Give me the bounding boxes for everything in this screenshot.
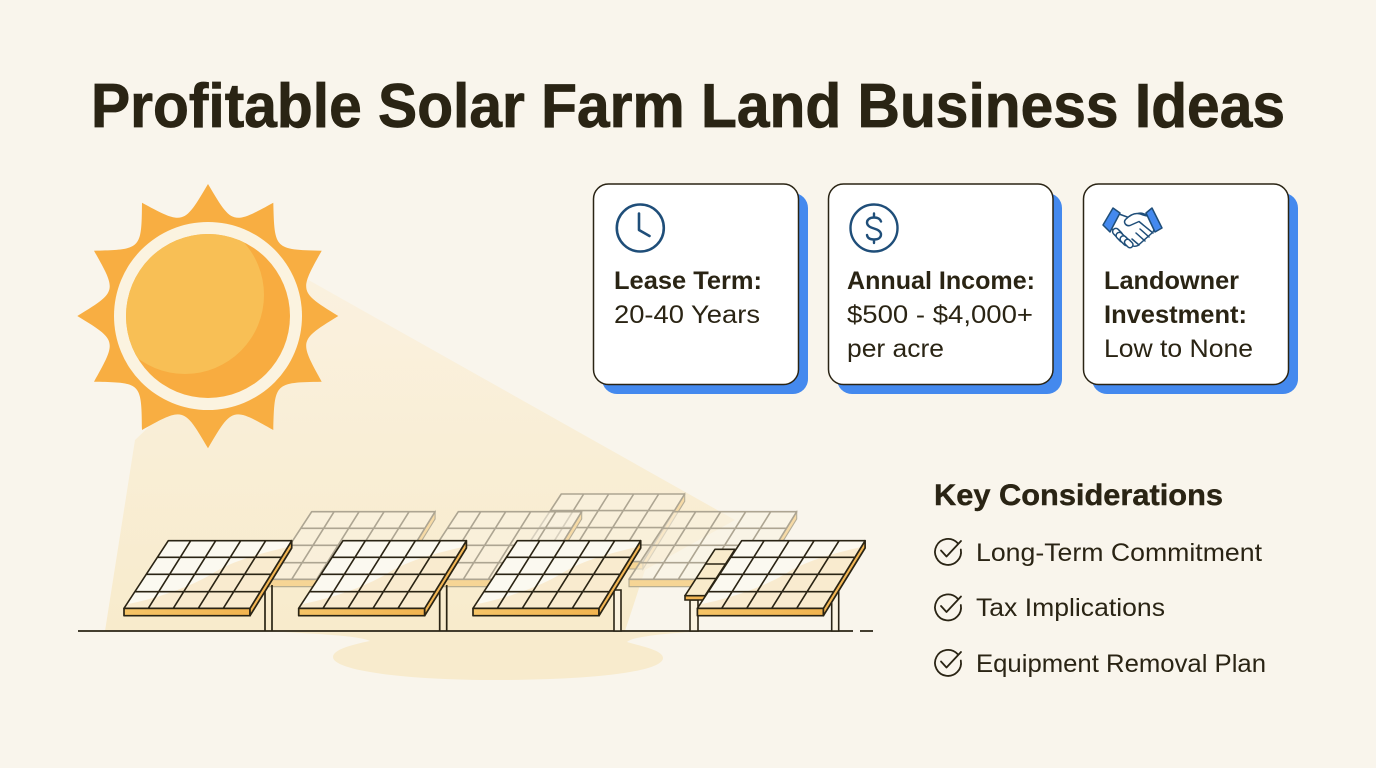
icon: clock (617, 204, 664, 252)
lease term text (614, 267, 762, 329)
ground glow (283, 632, 690, 680)
back row solar panels (267, 494, 797, 587)
sunlight beam (105, 278, 735, 631)
solar panel 2 (299, 541, 466, 631)
checklist item: long-term commitment: Long-Term Commitment (976, 539, 1262, 567)
annual income text: Annual Income: (847, 267, 1035, 295)
icon: sun (77, 184, 338, 448)
key considerations heading: Key Considerations (934, 479, 1223, 512)
checklist item: tax implications: Tax Implications (976, 594, 1165, 622)
landowner investment text: Investment: (1104, 301, 1247, 329)
landowner investment text (1104, 267, 1253, 363)
landowner investment text: Low to None (1104, 335, 1253, 363)
card: lease term (594, 184, 808, 394)
solar panel 4 (697, 541, 865, 631)
title: Profitable Solar Farm Land Business Ideas (91, 72, 1285, 141)
solar panel 3 (473, 541, 641, 631)
small side panel (685, 549, 735, 631)
annual income text: per acre (847, 335, 944, 363)
ground line (78, 630, 873, 632)
card: annual income (828, 184, 1062, 394)
solar panel 1 (124, 541, 292, 631)
landowner investment text: Landowner (1104, 267, 1239, 295)
checklist item: equipment removal plan: Equipment Removal Plan (976, 650, 1266, 678)
lease term text: Lease Term: (614, 267, 762, 295)
annual income text: $500 - $4,000+ (847, 301, 1033, 329)
annual income text (847, 267, 1035, 363)
lease term text: 20-40 Years (614, 301, 760, 329)
icon: dollar (850, 204, 898, 252)
card: landowner investment (1084, 184, 1298, 394)
icon: handshake (1103, 208, 1162, 249)
